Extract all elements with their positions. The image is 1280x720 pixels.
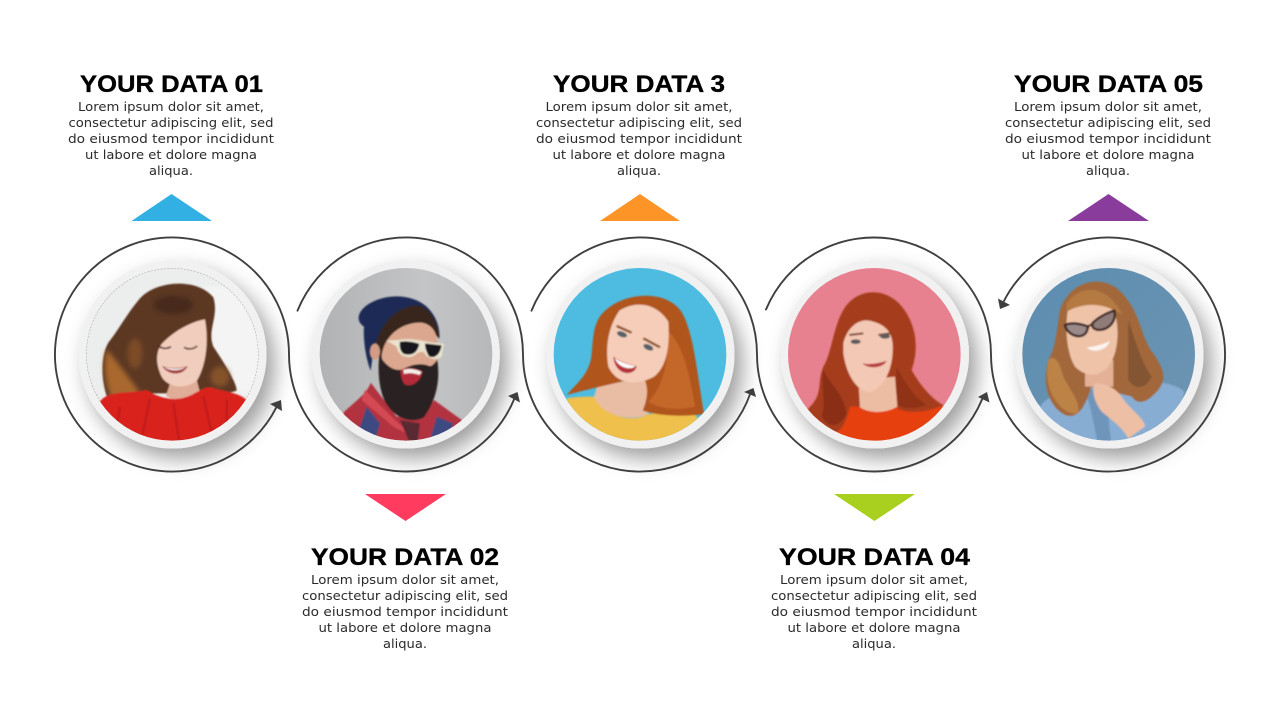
heading block: your data 05: YOUR DATA 05	[1014, 71, 1203, 98]
heading block: your data 04: Lorem ipsum dolor sit amet,	[780, 573, 968, 587]
heading block: your data 04: do eiusmod tempor incididunt	[771, 605, 977, 619]
triangle marker: blue	[132, 194, 212, 221]
heading block: your data 3: Lorem ipsum dolor sit amet,	[546, 100, 732, 114]
heading block: your data 01: Lorem ipsum dolor sit amet,	[78, 100, 264, 114]
heading block: your data 04	[771, 544, 977, 651]
arrowhead 3	[744, 388, 756, 397]
portrait: woman with glasses on blue-grey	[1022, 268, 1195, 441]
connector: loop through circles 4 and 5	[766, 237, 1225, 472]
heading block: your data 01: consectetur adipiscing elit, sed	[68, 116, 274, 130]
heading block: your data 3	[536, 71, 742, 178]
disc: person 4	[781, 260, 969, 448]
heading block: your data 01: aliqua.	[149, 164, 193, 178]
arrowhead 2	[508, 392, 520, 402]
connector: loop through circles 2 and 3	[298, 237, 750, 472]
heading block: your data 05: Lorem ipsum dolor sit amet,	[1014, 100, 1202, 114]
heading block: your data 02: Lorem ipsum dolor sit amet,	[311, 573, 499, 587]
triangle marker: orange	[600, 194, 680, 221]
heading block: your data 3: ut labore et dolore magna	[552, 148, 726, 162]
disc: person 5	[1016, 260, 1204, 448]
triangle marker: purple	[1068, 194, 1149, 221]
heading block: your data 02: ut labore et dolore magna	[318, 621, 492, 635]
heading block: your data 3: consectetur adipiscing elit, sed	[536, 116, 742, 130]
heading block: your data 01: do eiusmod tempor incididunt	[68, 132, 274, 146]
heading block: your data 05: consectetur adipiscing elit, sed	[1005, 116, 1211, 130]
connector: loop through circles 3 and 4	[532, 237, 982, 472]
heading block: your data 02: consectetur adipiscing elit, sed	[302, 589, 508, 603]
heading block: your data 3: YOUR DATA 3	[553, 71, 725, 98]
heading block: your data 05: aliqua.	[1086, 164, 1130, 178]
portrait: red-haired woman on pink	[788, 268, 961, 441]
heading block: your data 02: YOUR DATA 02	[311, 544, 499, 571]
triangle marker: green	[834, 494, 915, 521]
arrowhead 4	[978, 392, 990, 402]
heading block: your data 02: do eiusmod tempor incididunt	[302, 605, 508, 619]
disc: person 1	[78, 260, 266, 448]
disc: person 3	[546, 260, 734, 448]
heading block: your data 02	[302, 544, 508, 651]
heading block: your data 01: ut labore et dolore magna	[85, 148, 257, 162]
arrowhead 5	[998, 298, 1010, 309]
triangle marker: red	[365, 494, 446, 521]
heading block: your data 3: aliqua.	[617, 164, 661, 178]
portrait: bearded man with beanie and sunglasses	[320, 268, 492, 441]
connector: loop through circles 1 and 2	[55, 237, 514, 472]
infographic	[54, 75, 1226, 650]
heading block: your data 04: YOUR DATA 04	[779, 544, 971, 571]
heading block: your data 01: YOUR DATA 01	[80, 71, 263, 98]
portrait: woman with curly brown hair and red sweater	[86, 268, 258, 441]
heading block: your data 02: aliqua.	[383, 637, 427, 651]
heading block: your data 3: do eiusmod tempor incididunt	[536, 132, 742, 146]
heading block: your data 01	[68, 71, 274, 178]
heading block: your data 05: ut labore et dolore magna	[1022, 148, 1194, 162]
heading block: your data 04: ut labore et dolore magna	[788, 621, 960, 635]
disc: person 2	[312, 260, 500, 448]
heading block: your data 05: do eiusmod tempor incididunt	[1005, 132, 1211, 146]
portrait: smiling red-haired woman on blue	[554, 268, 726, 441]
heading block: your data 05	[1005, 71, 1211, 178]
arrowhead 1	[270, 400, 282, 411]
heading block: your data 04: consectetur adipiscing elit, sed	[771, 589, 977, 603]
heading block: your data 04: aliqua.	[852, 637, 896, 651]
